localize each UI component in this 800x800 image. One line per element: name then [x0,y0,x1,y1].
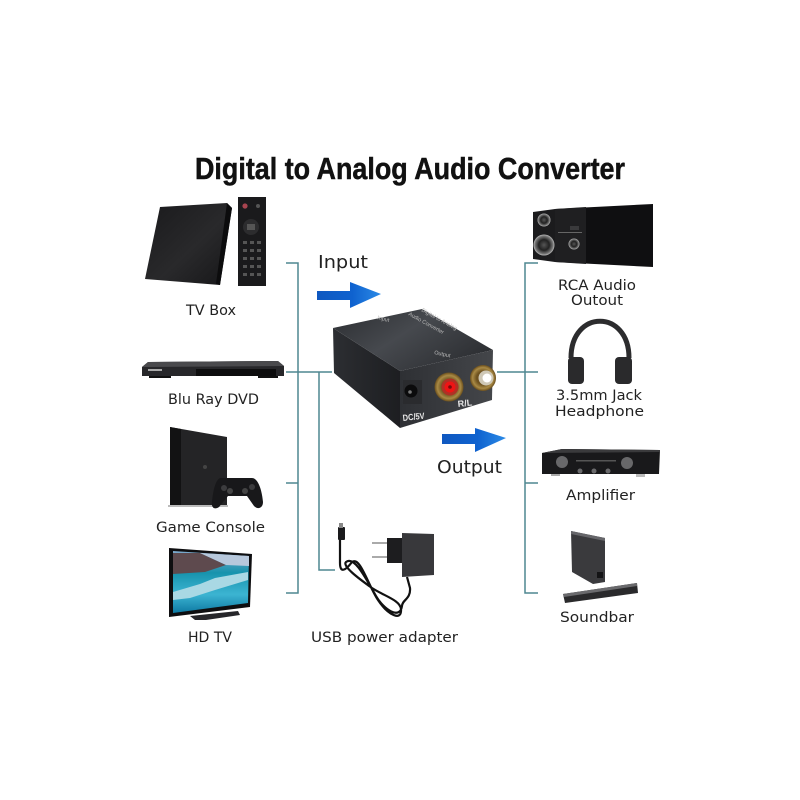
label: RCA Audio Output: RCA Audio [558,278,636,294]
converter device [333,308,496,428]
label: 3.5mm Jack Headphone [555,388,644,420]
label: Amplifier: Amplifier [566,488,635,504]
top face printing: Audio Converter [407,312,445,336]
label: Soundbar: Soundbar [560,610,634,626]
label: Blu Ray DVD: Blu Ray DVD [168,392,259,408]
icon: TV box with remote [145,197,266,286]
white RCA port [470,365,496,391]
port label R/L: R/L [457,397,473,409]
label: HD TV: HD TV [188,630,232,646]
title: Digital to Analog Audio Converter [195,151,625,186]
label: 3.5mm Jack Headphone: Headphone [555,404,644,420]
port label DC/5V: DC/5V [402,411,425,423]
label: Input: Input [318,252,368,273]
icon: Blu Ray DVD player [142,361,284,378]
top face printing [377,308,458,359]
top face printing: Input [377,315,390,324]
arrow: output [442,428,506,452]
arrow: input [317,282,381,308]
icon: soundbar with subwoofer [563,531,638,603]
label: 3.5mm Jack Headphone: 3.5mm Jack [556,388,643,404]
top face printing: Digital to Analog [420,308,458,332]
label: RCA Audio Output [558,278,636,309]
icon: USB power adapter [338,523,434,616]
connector lines: input side [286,263,335,593]
icon: HD TV [169,548,252,620]
label: RCA Audio Output: Outout [571,293,623,309]
connector lines: output side [497,263,538,593]
label: Game Console: Game Console [156,520,265,536]
label: TV Box: TV Box [185,303,236,319]
label: Output: Output [437,457,502,478]
label: USB power adapter: USB power adapter [311,630,458,646]
icon: stereo system [533,204,653,267]
icon: headphones [568,321,632,384]
red RCA port [434,372,464,402]
DC jack [403,380,422,404]
icon: amplifier [542,449,660,477]
top face printing: Output [434,350,451,359]
icon: game console with controller [168,427,263,508]
